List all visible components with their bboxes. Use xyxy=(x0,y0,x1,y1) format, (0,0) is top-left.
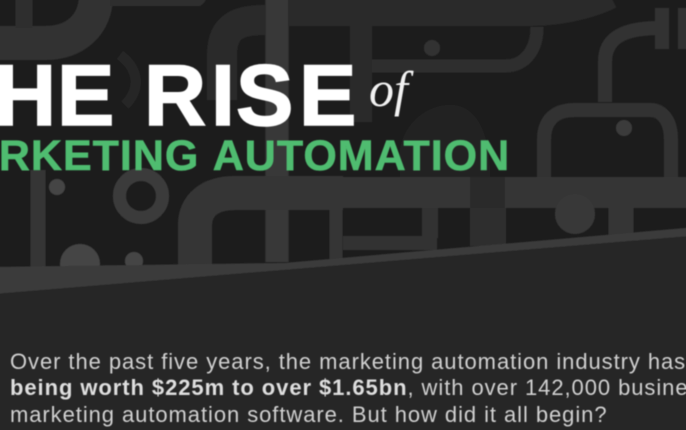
heading: of: of xyxy=(369,61,414,117)
pipes: dome xyxy=(400,105,490,178)
title xyxy=(0,48,510,180)
line 3: marketing automation software. But how did it all begin? xyxy=(10,402,608,427)
pipes: dots and ring xyxy=(49,40,632,284)
intro text xyxy=(10,349,686,427)
slanted band xyxy=(0,228,686,294)
lower panel xyxy=(0,236,686,430)
pipes: connector flange and bars xyxy=(343,8,686,250)
pipes: top left curve xyxy=(0,0,671,268)
